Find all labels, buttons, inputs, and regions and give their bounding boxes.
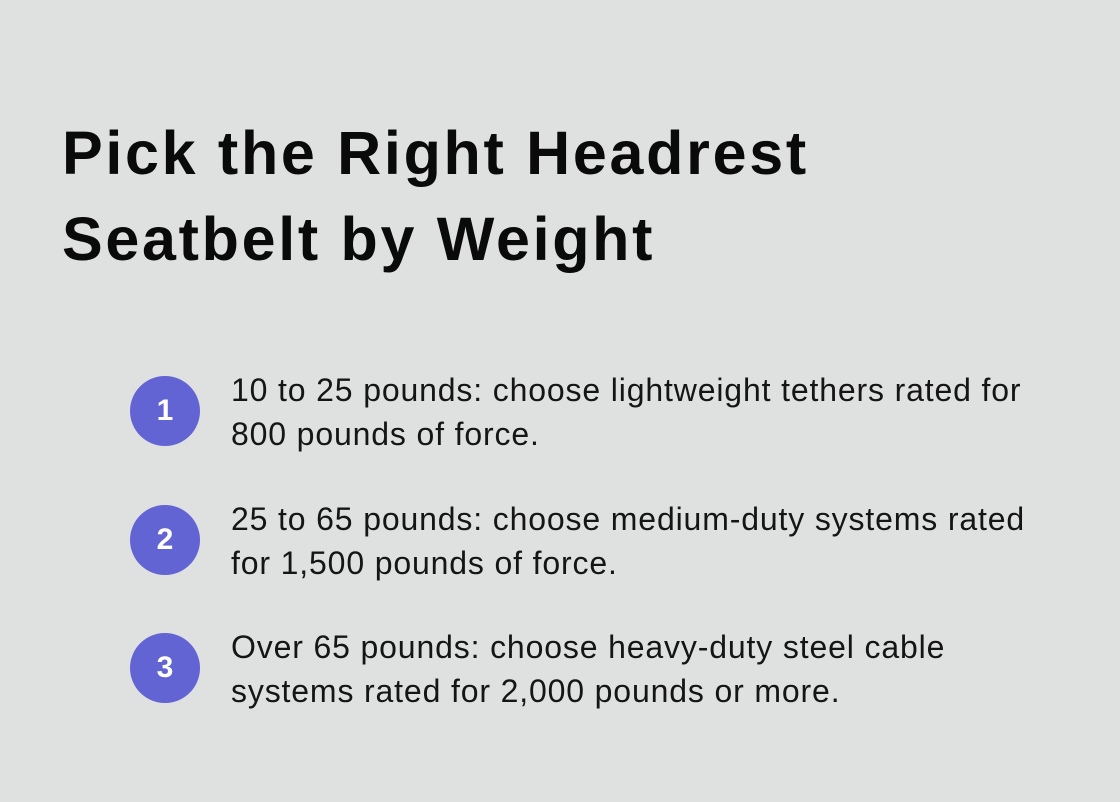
icon: number 1 (130, 376, 200, 446)
text 3: systems rated for 2,000 pounds or more. (231, 673, 840, 709)
text 2: 25 to 65 pounds: choose medium-duty systems rated (231, 501, 1025, 537)
text 2: for 1,500 pounds of force. (231, 545, 618, 581)
text 2 (231, 501, 1025, 581)
title: Pick the Right Headrest (62, 119, 809, 187)
title (62, 119, 809, 273)
text 3: Over 65 pounds: choose heavy-duty steel cable (231, 629, 945, 665)
text 3 (231, 629, 945, 709)
item 2 (130, 501, 1025, 581)
icon: number 1: 1 (157, 394, 173, 427)
text 1 (231, 372, 1021, 452)
text 1: 10 to 25 pounds: choose lightweight tethers rated for (231, 372, 1021, 408)
item 3 (130, 629, 945, 709)
title: Seatbelt by Weight (62, 205, 655, 273)
icon: number 2 (130, 505, 200, 575)
icon: number 3: 3 (157, 651, 173, 684)
text 1: 800 pounds of force. (231, 416, 540, 452)
icon: number 3 (130, 633, 200, 703)
icon: number 2: 2 (157, 523, 173, 556)
item 1 (130, 372, 1021, 452)
